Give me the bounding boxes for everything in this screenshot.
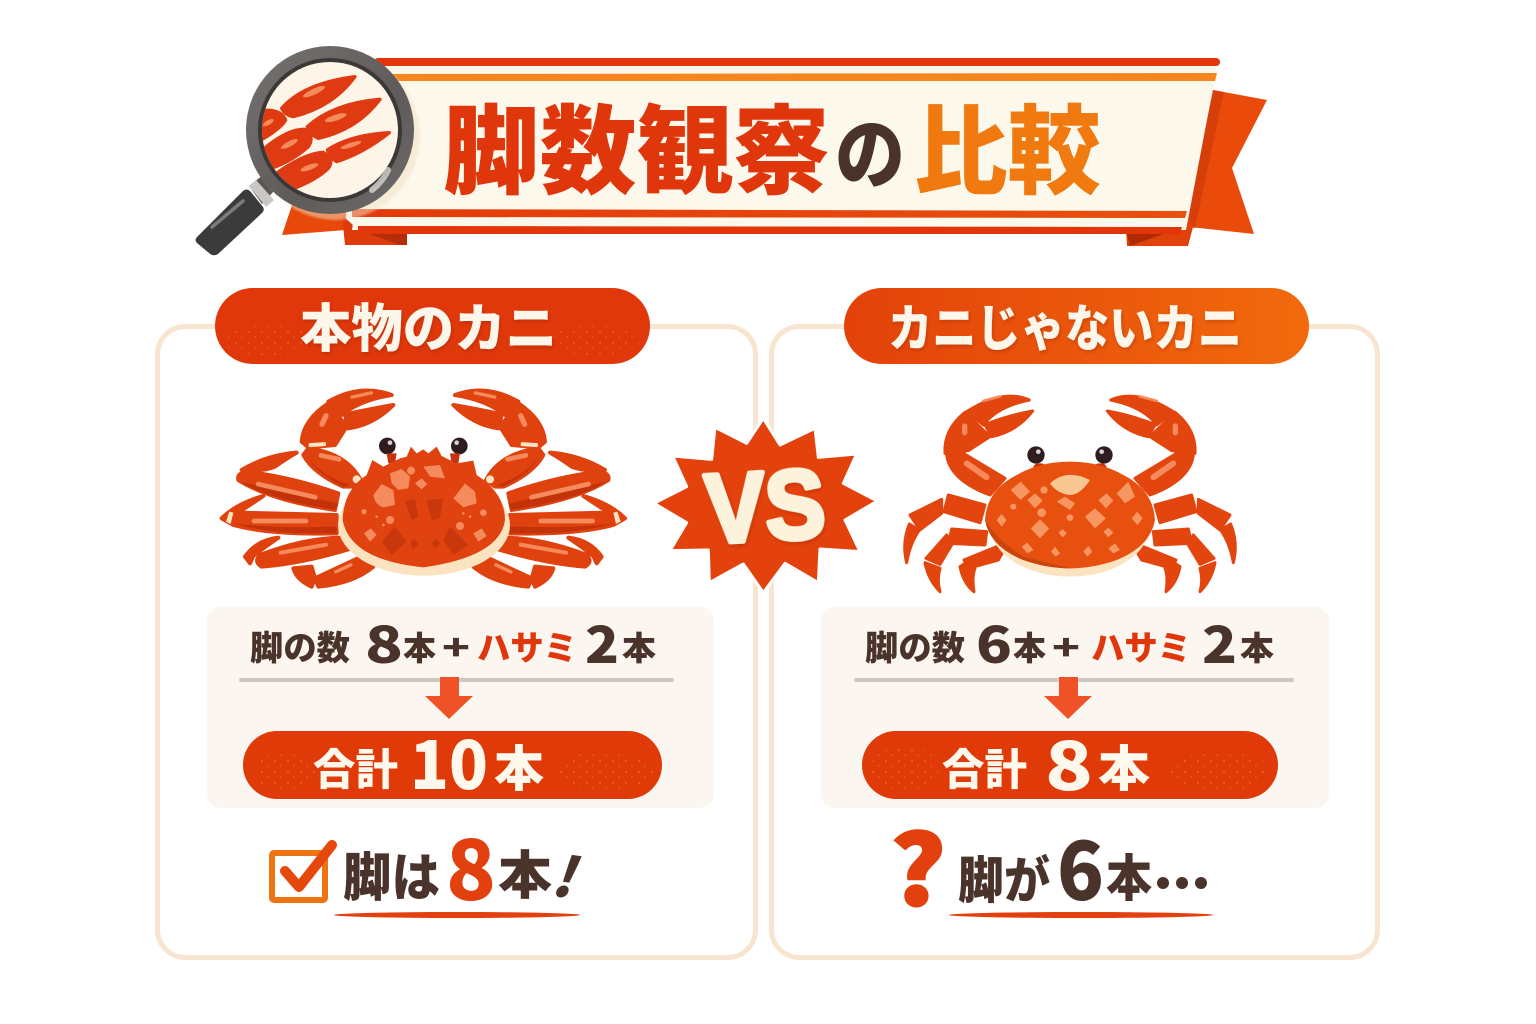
icon: check box xyxy=(272,845,332,900)
count formula: + xyxy=(442,621,470,670)
count formula: ハサミ xyxy=(477,621,577,670)
heading pill: real crab: 本物のカニ xyxy=(300,287,557,362)
VS starburst badge xyxy=(654,418,877,593)
illustration: crab with eight limbs xyxy=(905,395,1235,592)
count formula: 本 xyxy=(622,622,656,670)
title text xyxy=(443,73,1101,214)
magnifier handle xyxy=(196,165,286,255)
ribbon left tail xyxy=(282,205,407,245)
conclusion: eight legs: 本 xyxy=(498,834,552,909)
panel: real crab xyxy=(158,287,756,958)
count formula: 本 xyxy=(1013,622,1046,670)
count formula: 本 xyxy=(1240,622,1274,670)
title banner xyxy=(282,58,1267,246)
heading pill: real crab xyxy=(215,287,650,364)
total pill: 8 xyxy=(1045,714,1093,810)
count formula: 本 xyxy=(403,622,436,670)
total pill: 合計 xyxy=(942,736,1027,798)
total pill xyxy=(243,713,662,809)
conclusion: six legs: 本 xyxy=(1106,839,1152,911)
count formula: 8 xyxy=(365,606,403,678)
title text: 比較 xyxy=(914,73,1101,214)
title text: の xyxy=(835,93,905,205)
count formula: + xyxy=(1052,621,1080,670)
stats box: not-really crab xyxy=(821,606,1329,810)
conclusion: eight legs: 脚は xyxy=(343,836,440,911)
total pill: 本 xyxy=(1098,730,1150,801)
total pill xyxy=(862,714,1278,810)
count formula xyxy=(865,606,1274,678)
icon: question mark: ? xyxy=(890,794,946,933)
count formula: ハサミ xyxy=(1091,621,1191,670)
ribbon right tail xyxy=(1126,90,1267,246)
count formula: 脚の数 xyxy=(250,621,350,670)
magnified crab legs xyxy=(255,77,389,190)
count formula: 2 xyxy=(585,606,619,678)
conclusion: six legs xyxy=(890,794,1213,933)
icon: magnifying glass over crab legs xyxy=(196,46,420,255)
count formula: 2 xyxy=(1202,606,1237,678)
arrow down xyxy=(425,677,473,719)
conclusion: eight legs xyxy=(272,805,585,924)
total pill: 合計 xyxy=(313,736,398,798)
panel: not-really crab xyxy=(772,288,1378,958)
conclusion: six legs: 6 xyxy=(1057,808,1104,924)
ellipsis dots xyxy=(1157,877,1207,889)
count formula: 6 xyxy=(976,606,1012,678)
illustration: snow crab with ten limbs xyxy=(222,390,625,587)
stats box: real crab xyxy=(207,606,714,809)
heading pill: not-really crab: カニじゃないカニ xyxy=(888,289,1242,361)
ribbon body xyxy=(352,62,1218,230)
arrow down xyxy=(1044,677,1092,719)
conclusion: eight legs: ! xyxy=(547,832,585,916)
title text: 脚数観察 xyxy=(443,73,830,214)
conclusion: six legs: 脚が xyxy=(958,841,1050,913)
VS starburst badge: VS xyxy=(702,448,828,564)
total pill: 本 xyxy=(494,730,544,801)
count formula: 脚の数 xyxy=(865,621,965,670)
total pill: 10 xyxy=(410,713,488,809)
count formula xyxy=(250,606,656,678)
conclusion: eight legs: 8 xyxy=(446,805,496,924)
